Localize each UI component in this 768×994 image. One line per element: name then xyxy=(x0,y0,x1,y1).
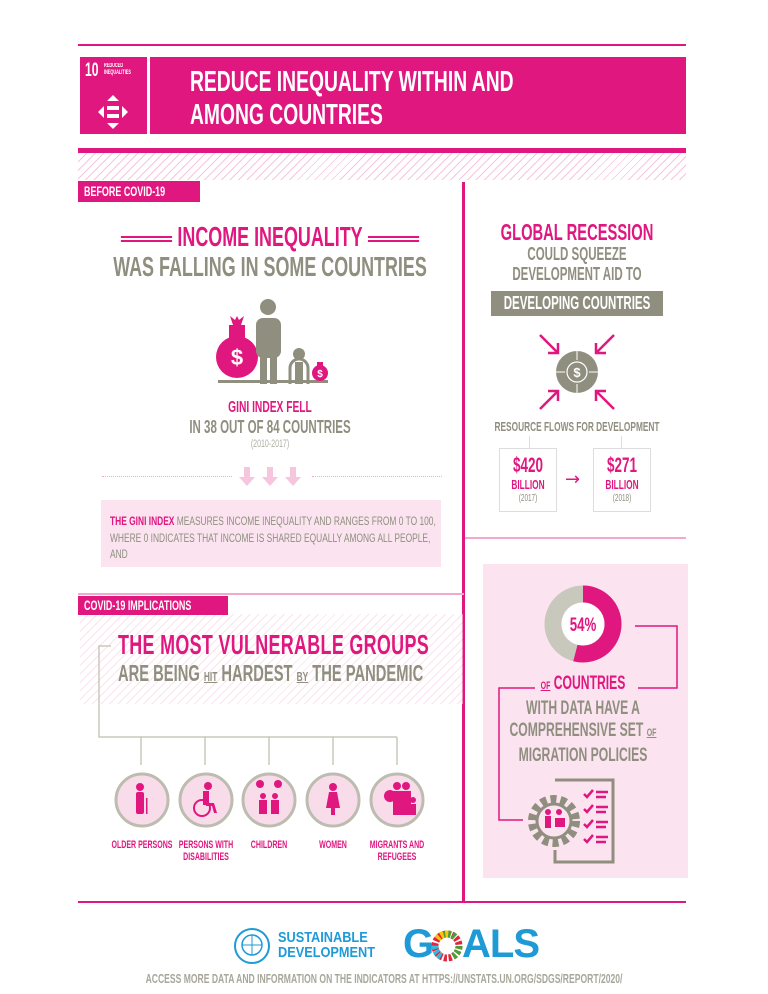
heading: global recession xyxy=(491,219,663,316)
title banner: AMONG COUNTRIES xyxy=(190,99,383,131)
stat: $420 billion xyxy=(499,448,557,512)
icons: vulnerable groups: CHILDREN xyxy=(251,839,287,851)
stat: $420 billion: BILLION xyxy=(511,477,545,492)
logo: sustainable development goals xyxy=(234,922,539,966)
icons: vulnerable groups: WOMEN xyxy=(319,839,347,851)
logo: sustainable development goals: G xyxy=(403,922,434,966)
callout: gini definition: AND xyxy=(110,547,128,561)
badge: SDG 10: INEQUALITIES xyxy=(104,70,131,76)
text: of countries: OF COUNTRIES xyxy=(541,673,625,694)
text: of countries xyxy=(510,673,656,766)
heading: global recession: DEVELOPING COUNTRIES xyxy=(504,293,650,313)
text: gini index fell: GINI INDEX FELL xyxy=(228,399,312,416)
icons: vulnerable groups: OLDER PERSONS xyxy=(111,839,173,851)
badge: SDG 10: 10 xyxy=(85,60,99,81)
icons: vulnerable groups: REFUGEES xyxy=(378,851,416,863)
label: before covid: BEFORE COVID-19 xyxy=(84,183,165,199)
heading: global recession: COULD SQUEEZE xyxy=(527,244,627,264)
logo: sustainable development goals: ALS xyxy=(462,922,539,966)
badge: SDG 10 xyxy=(80,57,147,134)
icon: rich and poor: $ xyxy=(231,345,243,370)
stat: $420 billion: $420 xyxy=(513,454,543,477)
heading: global recession: DEVELOPMENT AID TO xyxy=(512,264,642,284)
icon: gear checklist xyxy=(528,778,614,864)
callout: gini definition: THE GINI INDEX MEASURES INCOME INEQUALITY AND RANGES FROM 0 TO 100, xyxy=(110,514,436,528)
icons: vulnerable groups: DISABILITIES xyxy=(183,851,229,863)
icons: vulnerable groups: PERSONS WITH xyxy=(179,839,233,851)
heading: income inequality: INCOME INEQUALITY xyxy=(177,221,363,252)
text: gini index fell: IN 38 OUT OF 84 COUNTRIES xyxy=(189,417,351,437)
callout: gini definition xyxy=(101,500,441,567)
stat: $271 billion: BILLION xyxy=(605,477,639,492)
logo: sustainable development goals: DEVELOPMENT xyxy=(278,944,375,961)
text: resource flows: RESOURCE FLOWS FOR DEVELOPMENT xyxy=(494,419,660,434)
donut chart 54% xyxy=(544,586,622,662)
label: covid-19 implications xyxy=(78,596,228,615)
logo: sustainable development goals: SUSTAINABLE xyxy=(278,929,368,946)
text: of countries: WITH DATA HAVE A xyxy=(526,698,640,718)
label: covid-19 implications: COVID-19 IMPLICATIONS xyxy=(84,597,191,613)
icon: globe squeezed xyxy=(539,334,615,410)
heading: income inequality: WAS FALLING IN SOME COUNTRIES xyxy=(113,251,427,282)
text: gini index fell: (2010-2017) xyxy=(251,438,289,450)
icon: globe squeezed: $ xyxy=(573,365,581,380)
donut chart 54%: 54% xyxy=(570,615,597,636)
title banner: REDUCE INEQUALITY WITHIN AND xyxy=(190,66,514,98)
stat: $420 billion: (2017) xyxy=(519,493,537,504)
footer text: ACCESS MORE DATA AND INFORMATION ON THE INDICATORS AT HTTPS://UNSTATS.UN.ORG/SDGS/REPORT/2020/ xyxy=(146,971,622,986)
icon: rich and poor: $ xyxy=(317,369,323,380)
arrows down xyxy=(102,467,442,486)
text: of countries: COMPREHENSIVE SET OF xyxy=(510,720,656,741)
panel: migration policies xyxy=(483,564,688,878)
stat: $271 billion xyxy=(593,448,651,512)
stat: $271 billion: (2018) xyxy=(613,493,631,504)
heading: most vulnerable groups: ARE BEING HIT HARDEST BY THE PANDEMIC xyxy=(118,660,423,686)
icons: vulnerable groups xyxy=(111,772,424,863)
label: before covid xyxy=(78,181,200,202)
icons: vulnerable groups: MIGRANTS AND xyxy=(370,839,424,851)
icon: rich and poor xyxy=(216,299,328,384)
badge: SDG 10: REDUCED xyxy=(104,63,123,69)
stat: $271 billion: $271 xyxy=(607,454,637,477)
text: gini index fell xyxy=(189,399,351,450)
arrow right: → xyxy=(565,469,580,490)
heading: most vulnerable groups: THE MOST VULNERABLE GROUPS xyxy=(118,629,429,660)
text: of countries: MIGRATION POLICIES xyxy=(519,744,647,766)
title banner xyxy=(150,57,686,134)
callout: gini definition: WHERE 0 INDICATES THAT INCOME IS SHARED EQUALLY AMONG ALL PEOPLE, xyxy=(110,530,430,544)
heading: income inequality xyxy=(113,221,427,282)
heading: most vulnerable groups xyxy=(118,629,429,686)
heading: global recession: GLOBAL RECESSION xyxy=(501,219,653,245)
